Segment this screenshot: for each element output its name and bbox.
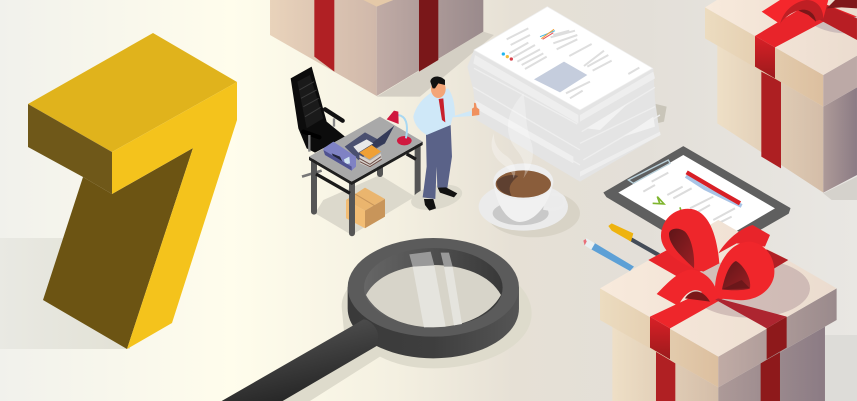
lens highlights — [413, 265, 446, 327]
lid — [705, 7, 823, 107]
blue pencil — [583, 238, 634, 271]
ribbon left — [314, 0, 334, 72]
desk legs — [314, 147, 418, 233]
bow left upper loop — [661, 209, 719, 272]
handle — [222, 319, 378, 401]
paper text lines — [643, 173, 735, 223]
red pen — [686, 176, 742, 206]
sheet color dots — [502, 52, 513, 61]
head — [431, 80, 446, 98]
body — [612, 327, 718, 401]
clipboard paper — [618, 155, 775, 247]
stack of papers — [467, 7, 667, 182]
bow shadow — [690, 259, 810, 318]
bow — [762, 0, 828, 24]
body ribbons — [656, 352, 675, 401]
clip — [628, 160, 670, 183]
lid ribbons — [650, 290, 723, 328]
lid sides — [600, 288, 718, 387]
lens — [366, 265, 501, 327]
cardboard box — [346, 188, 385, 228]
steam — [492, 93, 533, 178]
printer — [323, 142, 356, 171]
magnifying glass — [222, 238, 532, 401]
tie — [439, 98, 445, 122]
check mark — [653, 197, 664, 204]
floor shadow band right — [825, 335, 857, 401]
shirt — [413, 88, 472, 135]
clipboard — [604, 147, 790, 258]
shoes — [424, 187, 457, 211]
ring top — [348, 238, 519, 337]
magnifier shadow — [283, 258, 532, 401]
bow right loop — [715, 242, 774, 300]
saucer — [479, 183, 568, 231]
coffee — [496, 170, 551, 198]
top sheet — [474, 7, 653, 110]
cup body — [493, 180, 553, 222]
desk floor shadow — [315, 175, 415, 235]
gift box top right — [705, 0, 857, 200]
coffee cup — [479, 163, 580, 237]
trousers — [423, 125, 452, 199]
inner wall — [364, 248, 503, 327]
bow back loop — [718, 225, 770, 253]
businessman — [409, 77, 479, 214]
bow front tail — [657, 269, 718, 306]
number seven — [28, 33, 237, 349]
office chair — [291, 67, 345, 177]
desk top — [309, 117, 423, 185]
hair — [430, 77, 445, 88]
books — [359, 145, 382, 168]
body ribbon — [761, 72, 781, 168]
gift box top left — [270, 0, 494, 97]
hand — [472, 103, 479, 116]
laptop — [345, 126, 394, 160]
box body — [717, 45, 823, 193]
yellow pen — [608, 223, 660, 257]
lid ribbon — [755, 36, 775, 78]
desk lamp — [387, 111, 412, 145]
office desk scene — [291, 67, 479, 235]
floor shadow band left — [0, 238, 130, 349]
sheet chart — [540, 29, 555, 39]
ribbon right — [419, 0, 438, 72]
sheet text lines — [507, 28, 639, 98]
sheet image placeholder — [534, 62, 587, 92]
gift box bottom right — [600, 209, 837, 401]
lid top — [600, 220, 837, 357]
ring side — [348, 287, 519, 358]
